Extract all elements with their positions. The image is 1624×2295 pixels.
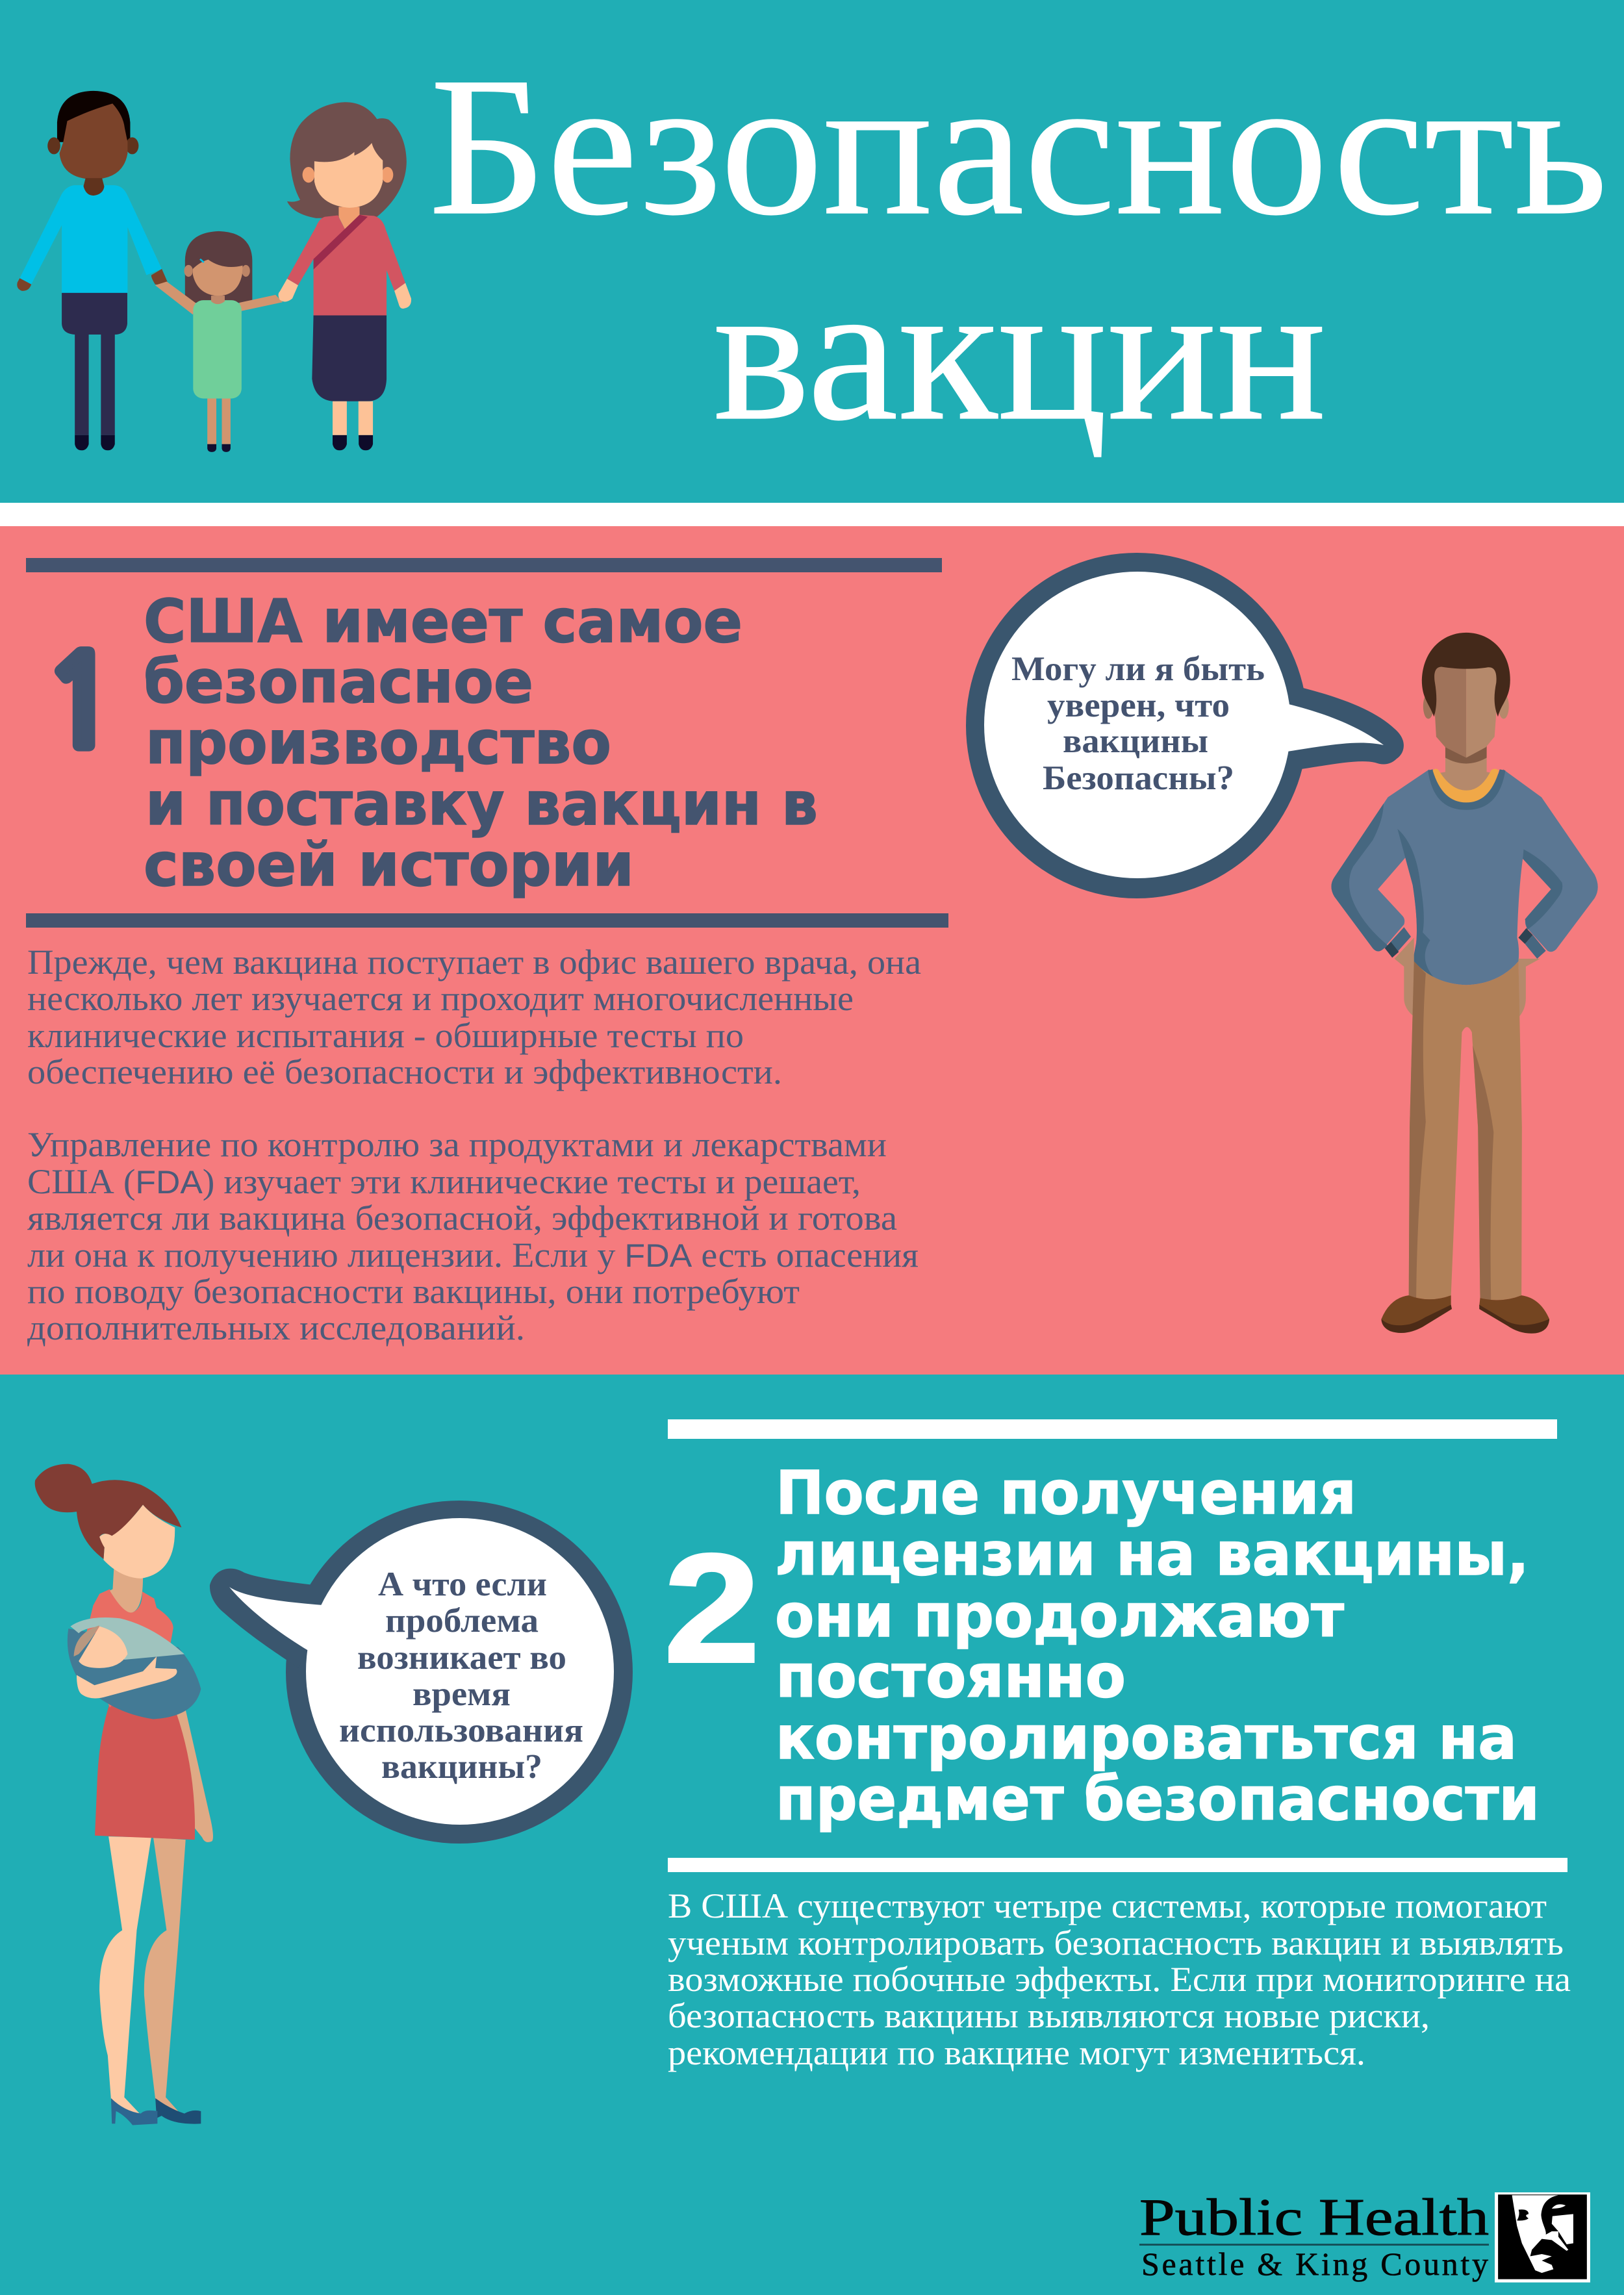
divider band — [0, 503, 1624, 526]
icon: man — [1331, 633, 1598, 1334]
speech bubble 2: использования — [339, 1712, 583, 1749]
icon: family — [17, 91, 411, 452]
heading 1: своей истории — [144, 830, 634, 900]
speech bubble 1: Могу ли я быть — [1011, 650, 1265, 688]
body text 1: дополнительных исследований. — [27, 1308, 525, 1347]
heading 2 — [775, 1458, 1540, 1834]
title: вакцин — [713, 242, 1326, 462]
panel: header — [0, 0, 1624, 503]
speech bubble 2: проблема — [385, 1602, 539, 1640]
heading 1 — [144, 587, 818, 900]
body text 1: обеспечению её безопасности и эффективности. — [27, 1052, 782, 1091]
heading 2: контролироватьтся на — [776, 1703, 1517, 1773]
heading 2: После получения — [776, 1458, 1356, 1528]
body text 1 — [27, 943, 921, 1347]
icon: woman with baby — [35, 1464, 213, 2125]
body text 1: клинические испытания - обширные тесты по — [27, 1016, 744, 1055]
panel: section 1 — [0, 526, 1624, 1375]
body text 1: ли она к получению лицензии. Если у FDA есть опасения — [27, 1236, 919, 1274]
speech bubble 1: Безопасны? — [1043, 759, 1234, 797]
heading 2: они продолжают — [775, 1581, 1344, 1651]
heading 1: безопасное — [144, 647, 533, 716]
body text 2 — [668, 1886, 1571, 2072]
title — [429, 36, 1608, 462]
body text 1: является ли вакцина безопасной, эффективной и готова — [27, 1198, 897, 1237]
speech bubble 2 — [210, 1501, 633, 1844]
body text 1: по поводу безопасности вакцины, они потребуют — [27, 1272, 800, 1311]
number 1: 1 — [43, 640, 120, 765]
speech bubble 2: время — [412, 1675, 511, 1713]
body text 1: Управление по контролю за продуктами и лекарствами — [27, 1125, 887, 1164]
body text 2: рекомендации по вакцине могут измениться. — [668, 2033, 1365, 2072]
heading 2: предмет безопасности — [776, 1764, 1540, 1834]
speech bubble 2: А что если — [378, 1566, 547, 1603]
body text 2: ученым контролировать безопасность вакцин и выявлять — [668, 1923, 1564, 1962]
body text 2: возможные побочные эффекты. Если при мониторинге на — [668, 1960, 1571, 1999]
title: Безопасность — [429, 36, 1608, 257]
number 2: 2 — [664, 1523, 760, 1695]
body text 2: В США существуют четыре системы, которые помогают — [668, 1886, 1547, 1925]
heading 2: лицензии на вакцины, — [775, 1519, 1529, 1589]
speech bubble 1 — [966, 553, 1404, 898]
speech bubble 1: вакцины — [1063, 722, 1208, 760]
logo: Public Health Seattle & King County: Seattle & King County — [1141, 2246, 1488, 2282]
panel: section 2 — [0, 1375, 1624, 2295]
heading 1: производство — [146, 708, 611, 778]
icon: logo face — [1495, 2192, 1590, 2283]
speech bubble 2: вакцины? — [381, 1748, 542, 1786]
heading 1: США имеет самое — [144, 587, 742, 656]
heading 1: и поставку вакцин в — [146, 769, 818, 839]
speech bubble 2: возникает во — [357, 1639, 566, 1677]
body text 1: несколько лет изучается и проходит многочисленные — [27, 979, 854, 1018]
logo: Public Health Seattle & King County: Public Health — [1139, 2189, 1489, 2246]
heading 2: постоянно — [776, 1642, 1126, 1711]
logo: Public Health Seattle & King County — [1139, 2189, 1590, 2283]
body text 2: безопасность вакцины выявляются новые риски, — [668, 1996, 1430, 2035]
speech bubble 1: уверен, что — [1047, 687, 1230, 724]
body text 1: США (FDA) изучает эти клинические тесты и решает, — [27, 1162, 861, 1201]
body text 1: Прежде, чем вакцина поступает в офис вашего врача, она — [27, 943, 921, 982]
